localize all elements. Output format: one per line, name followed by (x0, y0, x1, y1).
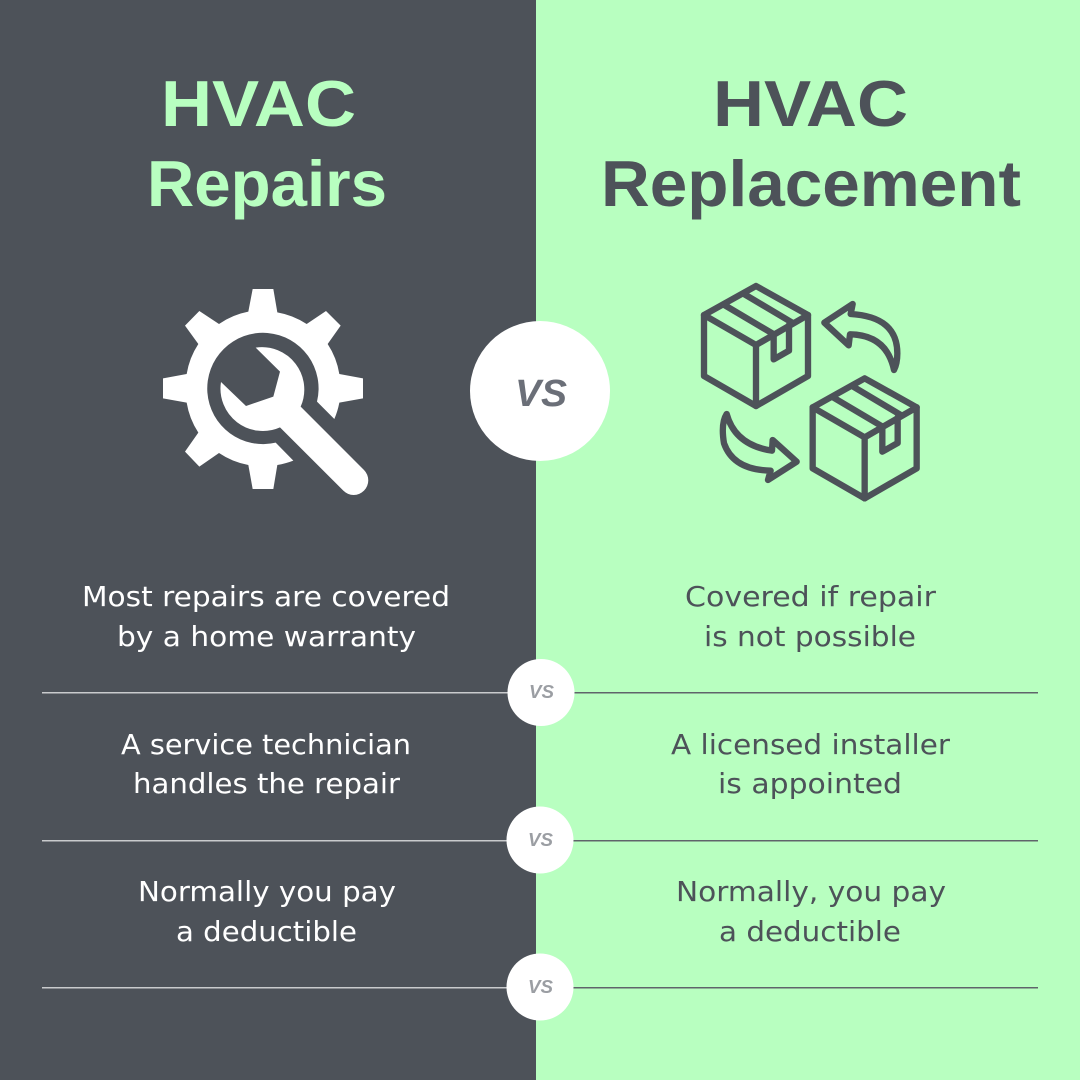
row 1 right text: Covered if repair (685, 580, 937, 613)
row 1 divider (42, 659, 1038, 726)
heading: HVAC Repairs (147, 67, 387, 220)
row 3 divider: VS (528, 977, 553, 997)
row 3 left text: Normally you pay (138, 875, 396, 908)
row 1 left text (82, 580, 450, 653)
row 2 left text: handles the repair (133, 767, 400, 800)
row 2 right text: is appointed (718, 767, 902, 800)
heading: HVAC Replacement (601, 67, 1021, 220)
row 2 divider: VS (528, 830, 553, 850)
row 1 left text: Most repairs are covered (82, 580, 450, 613)
heading: HVAC Replacement: Replacement (601, 147, 1021, 220)
row 3 left text (138, 875, 396, 948)
row 3 divider (42, 954, 1038, 1020)
row 2 left text (121, 728, 411, 800)
badge: main vs (470, 321, 610, 461)
row 1 left text: by a home warranty (117, 620, 416, 653)
row 3 left text: a deductible (176, 915, 357, 948)
heading: HVAC Repairs: Repairs (147, 147, 387, 220)
row 3 right text: Normally, you pay (676, 875, 946, 908)
row 2 left text: A service technician (121, 728, 411, 761)
row 2 divider (42, 806, 1038, 874)
row 1 right text (685, 580, 937, 653)
row 2 right text: A licensed installer (671, 728, 951, 761)
panel: repairs background (0, 0, 536, 1080)
badge: main vs: VS (515, 373, 567, 415)
heading: HVAC Replacement: HVAC (713, 67, 908, 140)
row 3 right text (676, 875, 946, 948)
row 1 divider: VS (529, 682, 554, 702)
panel: replacement background (536, 0, 1080, 1080)
row 2 right text (671, 728, 951, 800)
row 1 right text: is not possible (704, 620, 916, 653)
icon: swapping boxes (704, 286, 917, 498)
icon: gear and wrench (163, 289, 368, 495)
row 3 right text: a deductible (719, 915, 901, 948)
heading: HVAC Repairs: HVAC (161, 67, 356, 140)
